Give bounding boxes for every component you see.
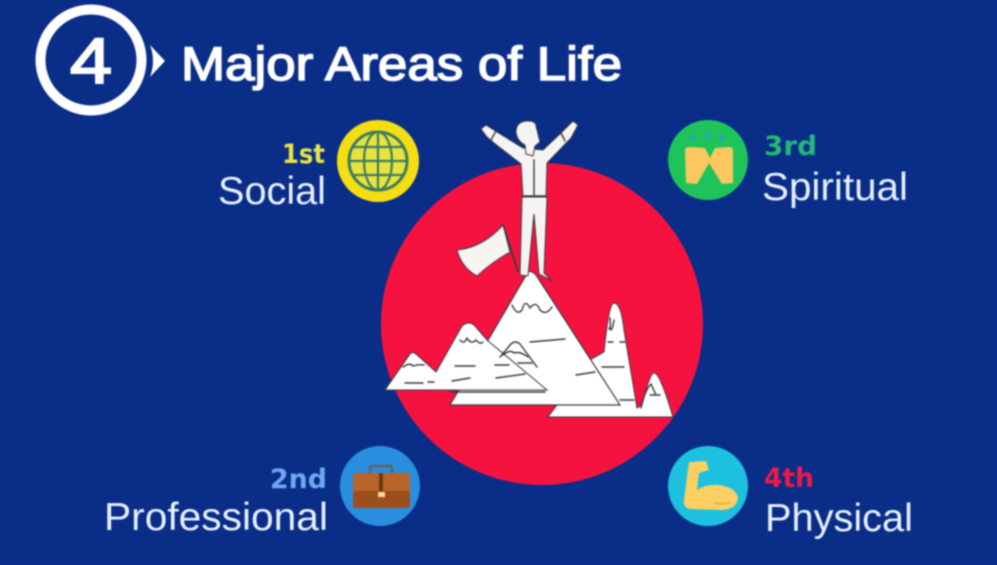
head — [516, 121, 540, 156]
icon: briefcase — [340, 446, 420, 526]
numeral badge — [40, 10, 142, 110]
heading: Major Areas of Life — [181, 37, 622, 90]
arrow — [150, 45, 165, 77]
label: Physical — [765, 497, 913, 540]
climber figure — [481, 121, 578, 281]
label: Spiritual — [762, 166, 908, 209]
rank: 2nd — [270, 464, 327, 495]
legs — [520, 197, 552, 281]
area: social — [218, 120, 419, 213]
area: physical — [668, 446, 913, 540]
label: Professional — [104, 496, 328, 539]
icon: raised hands — [668, 120, 748, 200]
left mountains — [385, 323, 547, 392]
icon: flexed arm — [668, 446, 748, 526]
label: Social — [218, 170, 326, 213]
collar and waist lines — [491, 131, 565, 196]
numeral badge: 4 — [70, 25, 112, 97]
flag — [457, 224, 518, 276]
arms and torso — [481, 121, 578, 197]
main peak — [450, 271, 620, 405]
rank: 4th — [764, 463, 814, 494]
area: spiritual — [668, 120, 908, 209]
red circle — [381, 163, 703, 485]
area: professional — [104, 446, 420, 539]
right mountains — [548, 303, 673, 417]
icon: globe — [337, 120, 419, 202]
mountains illustration — [385, 271, 673, 417]
rank: 3rd — [764, 131, 817, 162]
title group — [40, 10, 622, 110]
rank: 1st — [282, 139, 325, 170]
